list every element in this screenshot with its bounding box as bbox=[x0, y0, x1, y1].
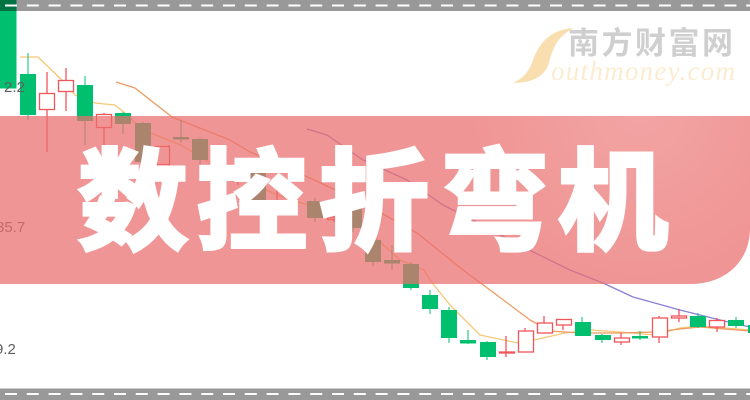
title: 数 bbox=[78, 142, 188, 265]
red candles bbox=[40, 68, 724, 357]
watermark domain: outhmoney.com bbox=[551, 56, 735, 86]
bottom film strip bbox=[0, 388, 750, 400]
watermark: southmoney logo bbox=[513, 26, 735, 86]
top film strip bbox=[0, 0, 750, 11]
watermark Chinese name: 南方财富网 bbox=[568, 26, 733, 61]
title: 折 bbox=[319, 142, 429, 265]
axis labels bbox=[0, 79, 25, 358]
title: 控 bbox=[197, 142, 307, 265]
moving average lines bbox=[20, 57, 750, 343]
title: 弯 bbox=[440, 142, 550, 265]
title bbox=[78, 142, 668, 265]
title: 机 bbox=[558, 142, 668, 265]
axis labels: 2.2 bbox=[4, 79, 25, 96]
banner bbox=[0, 116, 750, 284]
crescent S mark bbox=[513, 28, 574, 83]
